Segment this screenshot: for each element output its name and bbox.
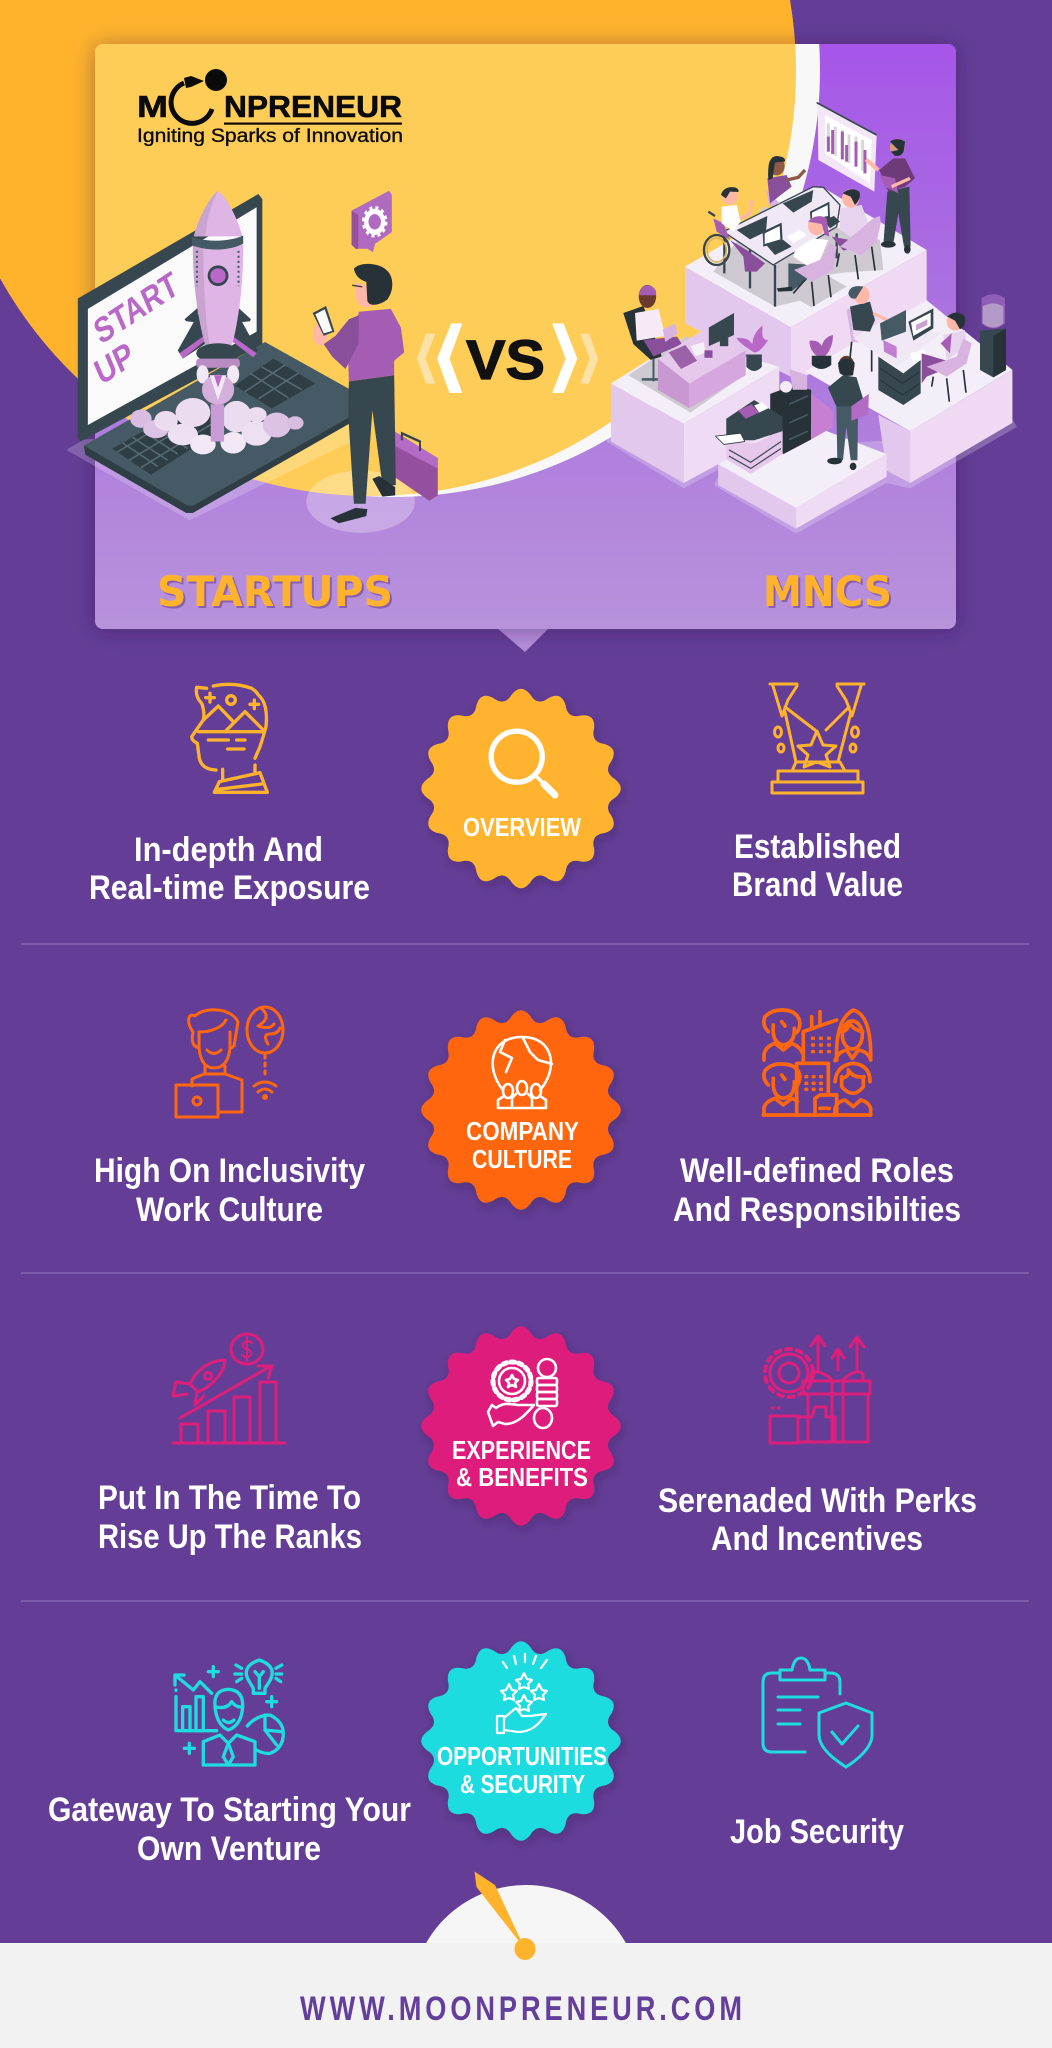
needle — [474, 1872, 536, 1960]
icon: magnifier — [491, 731, 555, 795]
speech bubble with gear — [352, 191, 392, 252]
logo: NPRENEUR — [224, 89, 402, 124]
screen text: UP — [89, 334, 139, 392]
row: overview — [89, 684, 903, 907]
text: high on inclusivity work culture: Work Culture — [136, 1191, 323, 1229]
panel heading: mncs: MNCS — [765, 569, 894, 618]
text: job security: Job Security — [730, 1813, 904, 1851]
text: in-depth and real-time exposure — [89, 831, 370, 907]
woman at back of table — [766, 156, 805, 207]
panel pointer — [497, 628, 549, 652]
badge: overview — [421, 689, 621, 888]
panel heading: mncs: MNCS — [763, 567, 892, 616]
website url: WWW.MOONPRENEUR.COM — [300, 1989, 746, 2028]
row: company culture — [94, 1007, 961, 1229]
badge label: & BENEFITS — [456, 1462, 588, 1492]
right chevrons — [552, 323, 598, 393]
row: experience and benefits — [98, 1326, 977, 1558]
laptop lid — [78, 194, 262, 442]
front platform — [718, 419, 887, 529]
icon: person with laptop and globe — [176, 1007, 283, 1117]
text: put in the time to rise up the ranks: Rise Up The Ranks — [98, 1518, 362, 1556]
text: high on inclusivity work culture: High On Inclusivity — [94, 1152, 365, 1190]
icon: stars over hand — [497, 1654, 547, 1733]
chart board — [817, 103, 877, 192]
laptops — [737, 190, 840, 255]
text: put in the time to rise up the ranks: Put In The Time To — [98, 1479, 361, 1517]
badge: company culture — [421, 1010, 621, 1210]
orange corner circle — [0, 0, 796, 496]
logo: Igniting Sparks of Innovation — [137, 126, 403, 147]
headset woman and desk — [847, 286, 942, 405]
icon: head with mountains — [192, 684, 267, 792]
icon: businessman with charts — [175, 1660, 283, 1765]
rocket — [178, 191, 258, 405]
badge label: COMPANY — [466, 1116, 579, 1146]
man at right of table — [832, 189, 881, 279]
panel heading: startups: STARTUPS — [159, 569, 395, 618]
standing presenter — [866, 139, 915, 254]
text: gateway to starting your own venture — [48, 1791, 411, 1868]
woman at front of table — [777, 216, 837, 306]
text: in-depth and real-time exposure: Real-time Exposure — [89, 869, 370, 907]
meeting table and team — [704, 156, 881, 307]
icon: people and buildings — [763, 1010, 871, 1115]
badge label: OPPORTUNITIES — [437, 1741, 607, 1771]
badge: experience and benefits — [421, 1326, 621, 1526]
water cooler — [980, 294, 1006, 377]
badge label: OVERVIEW — [463, 812, 581, 842]
left chevrons — [417, 323, 462, 393]
icon: trophy and spotlights — [770, 684, 864, 793]
text: established brand value: Brand Value — [732, 866, 903, 904]
screen text: START — [89, 264, 184, 352]
text: gateway to starting your own venture: Own Venture — [137, 1830, 321, 1868]
logo — [137, 69, 403, 147]
keyboard left — [112, 400, 231, 475]
row dividers — [21, 943, 1029, 1602]
badge label: CULTURE — [472, 1144, 572, 1174]
potted plants — [737, 325, 833, 371]
panel base — [95, 44, 956, 629]
pink office desk — [658, 313, 746, 408]
text: put in the time to rise up the ranks — [98, 1479, 362, 1556]
icon: globe with people — [493, 1037, 552, 1108]
left platform — [611, 336, 779, 483]
icon: gear, gift and hand — [765, 1336, 870, 1443]
right platform — [805, 300, 1012, 483]
text: high on inclusivity work culture — [94, 1152, 365, 1229]
footer dome — [411, 1885, 641, 2048]
laptop base — [84, 342, 351, 513]
office upper scene — [704, 103, 1006, 405]
panel curved shapes — [95, 44, 820, 497]
text: established brand value — [732, 828, 903, 904]
VS text: VS — [466, 328, 545, 391]
text: well-defined roles and responsibilties — [673, 1152, 961, 1229]
text: well-defined roles and responsibilties: Well-defined Roles — [680, 1152, 954, 1190]
text: serenaded with perks and incentives: Serenaded With Perks — [658, 1482, 977, 1520]
person with phone — [306, 264, 438, 533]
row: opportunities and security — [48, 1641, 904, 1868]
office lower platforms — [607, 285, 1017, 534]
text: serenaded with perks and incentives: And Incentives — [711, 1520, 923, 1558]
icon: clipboard and shield — [763, 1658, 872, 1767]
text: in-depth and real-time exposure: In-depth And — [134, 831, 323, 869]
hero panel — [81, 32, 964, 652]
footer — [0, 1872, 1052, 2048]
woman in wheelchair — [704, 187, 765, 272]
text: serenaded with perks and incentives — [658, 1482, 977, 1558]
rocket exhaust clouds — [130, 398, 304, 454]
footer band — [0, 1943, 1052, 2048]
panel heading: startups: STARTUPS — [157, 567, 393, 616]
badge label: EXPERIENCE — [452, 1435, 591, 1465]
badge label: & SECURITY — [460, 1769, 585, 1799]
text: established brand value: Established — [734, 828, 901, 866]
logo: M — [137, 89, 168, 124]
seated woman at desk — [623, 285, 682, 381]
illustration: laptop with rocket — [66, 191, 462, 533]
office upper platform — [685, 187, 927, 377]
badge: opportunities and security — [421, 1641, 621, 1841]
standing man in front — [827, 356, 869, 470]
icon: rocket and growth bars — [173, 1334, 285, 1443]
laptop screen — [88, 207, 257, 425]
man at right desk — [922, 312, 972, 402]
printer and filing cabinet — [716, 369, 833, 474]
platform shadows — [607, 419, 1017, 534]
text: gateway to starting your own venture: Gateway To Starting Your — [48, 1791, 411, 1829]
icon: gear, coins and hand — [488, 1359, 557, 1428]
text: well-defined roles and responsibilties: And Responsibilties — [673, 1191, 961, 1229]
logo moon mark — [171, 69, 227, 123]
keyboard right — [235, 359, 315, 408]
laptop ground shadow — [66, 423, 356, 520]
